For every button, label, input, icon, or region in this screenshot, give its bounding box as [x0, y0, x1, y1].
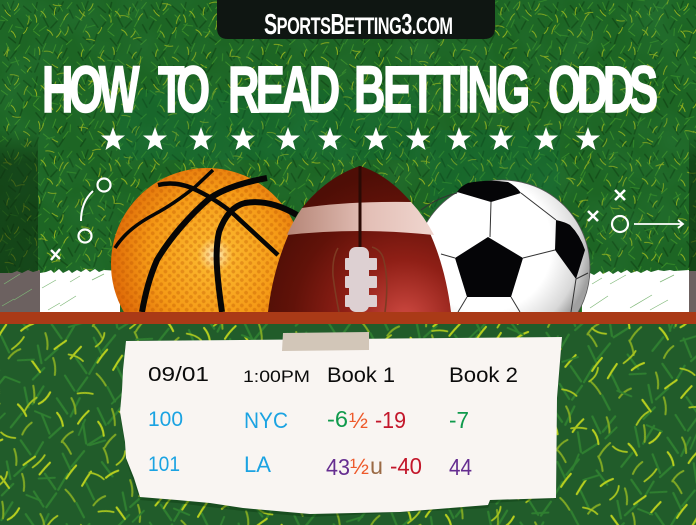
table header row: Book 2 [449, 364, 518, 387]
table header row: 1:00PM [243, 367, 310, 386]
play diagram: right [588, 190, 683, 232]
table row 101 LA [148, 452, 472, 480]
table header row: Book 1 [327, 364, 395, 387]
row of twelve stars [101, 127, 600, 150]
table row 101 LA: 43 [326, 454, 350, 480]
grass background [0, 0, 696, 325]
table row 100 NYC [148, 406, 469, 433]
play diagram: left [51, 178, 110, 260]
logo banner [217, 0, 495, 41]
table row 100 NYC: NYC [244, 408, 288, 433]
table header row [148, 364, 518, 387]
table row 101 LA: 44 [449, 454, 472, 480]
football lace outline [333, 247, 387, 312]
table row 100 NYC: 100 [148, 408, 183, 431]
table row 101 LA: LA [244, 452, 271, 477]
lower grass [0, 324, 696, 525]
football stripe [287, 202, 434, 235]
table row 101 LA: ½ [350, 454, 369, 479]
title: TO [158, 52, 210, 126]
table row 100 NYC: -6 [327, 406, 348, 432]
icon: american football [268, 166, 451, 312]
table row 101 LA: u [370, 453, 383, 479]
white sideline stripes [0, 269, 696, 312]
title: ODDS [548, 52, 658, 126]
table row 101 LA: 101 [148, 453, 180, 476]
title: READ [228, 52, 340, 126]
football seam [358, 166, 362, 248]
title [42, 52, 658, 126]
table row 100 NYC: ½ [349, 408, 368, 433]
football laces [345, 247, 377, 312]
logo text: SPORTSBETTING3.COM [264, 9, 453, 41]
balls group [111, 166, 590, 312]
icon: basketball [111, 168, 298, 312]
red divider bar [0, 312, 696, 324]
title: HOW [42, 52, 140, 126]
table header row: 09/01 [148, 364, 209, 386]
panel: torn paper note [120, 332, 562, 517]
table row 101 LA: -40 [390, 453, 422, 479]
tape strip [282, 332, 369, 351]
title: BETTING [354, 52, 530, 126]
table row 100 NYC: -7 [449, 407, 469, 433]
icon: soccer ball [420, 180, 590, 312]
table row 100 NYC: -19 [375, 407, 406, 433]
